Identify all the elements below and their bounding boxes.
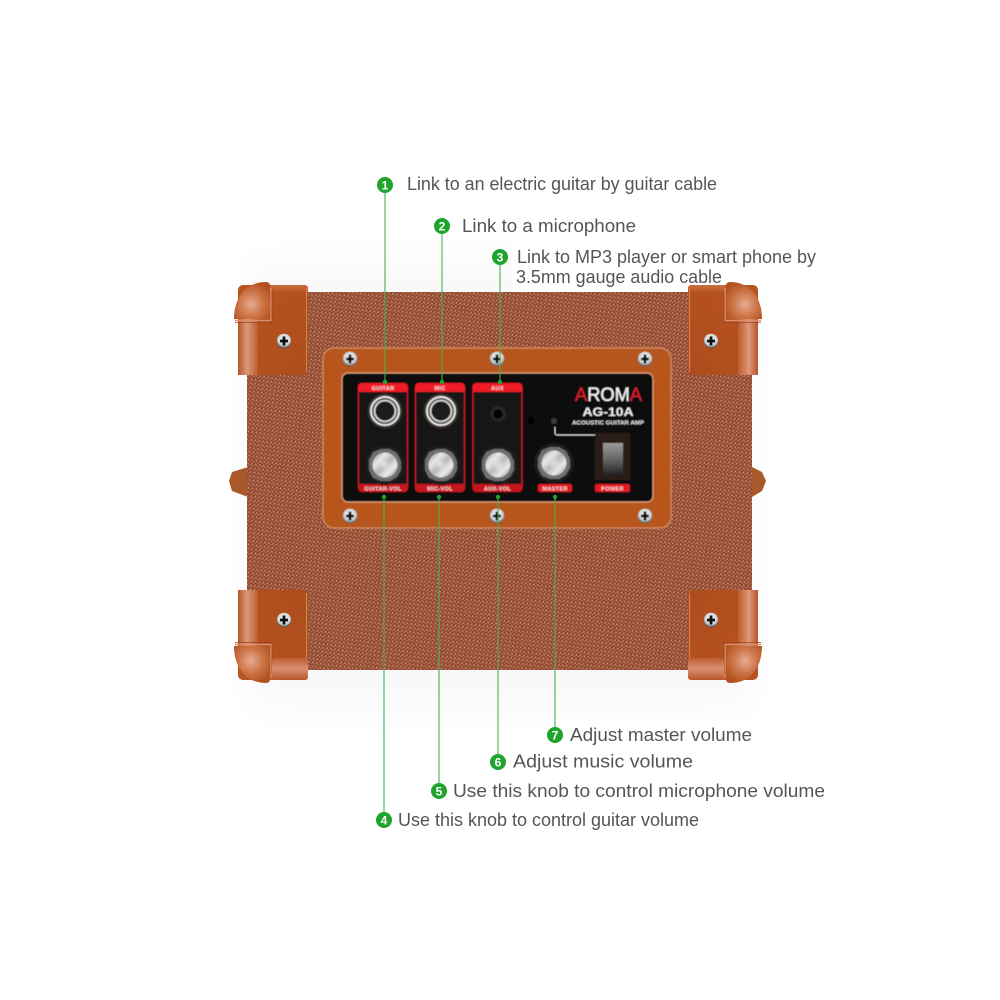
AROMA logo: AROMA <box>575 384 642 406</box>
aux section: AUX <box>491 386 504 392</box>
power LED and connector <box>551 418 595 435</box>
leader lines <box>382 190 557 815</box>
power switch: POWER <box>601 486 624 492</box>
callout 6: 6 <box>495 756 502 770</box>
callout 7: 7 <box>552 728 559 742</box>
callout 3: 3 <box>497 250 504 264</box>
mic section: MIC-VOL <box>427 486 453 492</box>
guitar section: GUITAR-VOL <box>364 486 402 492</box>
corner protector: bottom right <box>688 590 762 683</box>
callout 5: 5 <box>436 784 443 798</box>
mic section: MIC <box>434 386 446 392</box>
aux section: AUX-VOL <box>484 486 511 492</box>
cabinet body with textured covering <box>247 292 752 670</box>
model description: ACOUSTIC GUITAR AMP <box>572 420 644 426</box>
panel screws <box>343 352 652 523</box>
mic section <box>415 383 465 492</box>
guitar section <box>358 383 408 492</box>
right side handle bracket <box>752 467 766 497</box>
callout 6: Adjust music volume <box>513 750 693 772</box>
corner protector: top left <box>234 282 308 375</box>
left side handle bracket <box>229 467 248 497</box>
callout 4: Use this knob to control guitar volume <box>398 809 699 830</box>
power switch <box>595 433 630 492</box>
callout 2: Link to a microphone <box>462 215 636 236</box>
callout 7: Adjust master volume <box>570 724 752 745</box>
amp cabinet <box>229 282 766 683</box>
master knob: MASTER <box>542 486 568 492</box>
callout 5: Use this knob to control microphone volume <box>453 780 825 801</box>
model name: AG-10A <box>582 405 634 419</box>
corner protector: bottom left <box>234 590 308 683</box>
master knob <box>534 443 574 492</box>
white text backings <box>395 172 830 836</box>
corner protector: top right <box>688 282 762 375</box>
panel frame <box>323 348 671 528</box>
callout 1: 1 <box>382 178 389 192</box>
guitar section: GUITAR <box>372 386 394 392</box>
black faceplate <box>342 373 653 502</box>
control panel <box>323 348 671 528</box>
callout 1: Link to an electric guitar by guitar cable <box>407 173 717 194</box>
callout 3: 3.5mm gauge audio cable <box>516 266 722 287</box>
callout 4: 4 <box>381 814 388 828</box>
small hole <box>528 418 534 424</box>
callout 3 <box>492 246 817 287</box>
callout 2: 2 <box>439 220 446 234</box>
cabinet screws <box>277 334 718 627</box>
soft shadow behind amp <box>250 260 750 710</box>
callout 3: Link to MP3 player or smart phone by <box>517 246 817 267</box>
aux section <box>472 383 522 492</box>
